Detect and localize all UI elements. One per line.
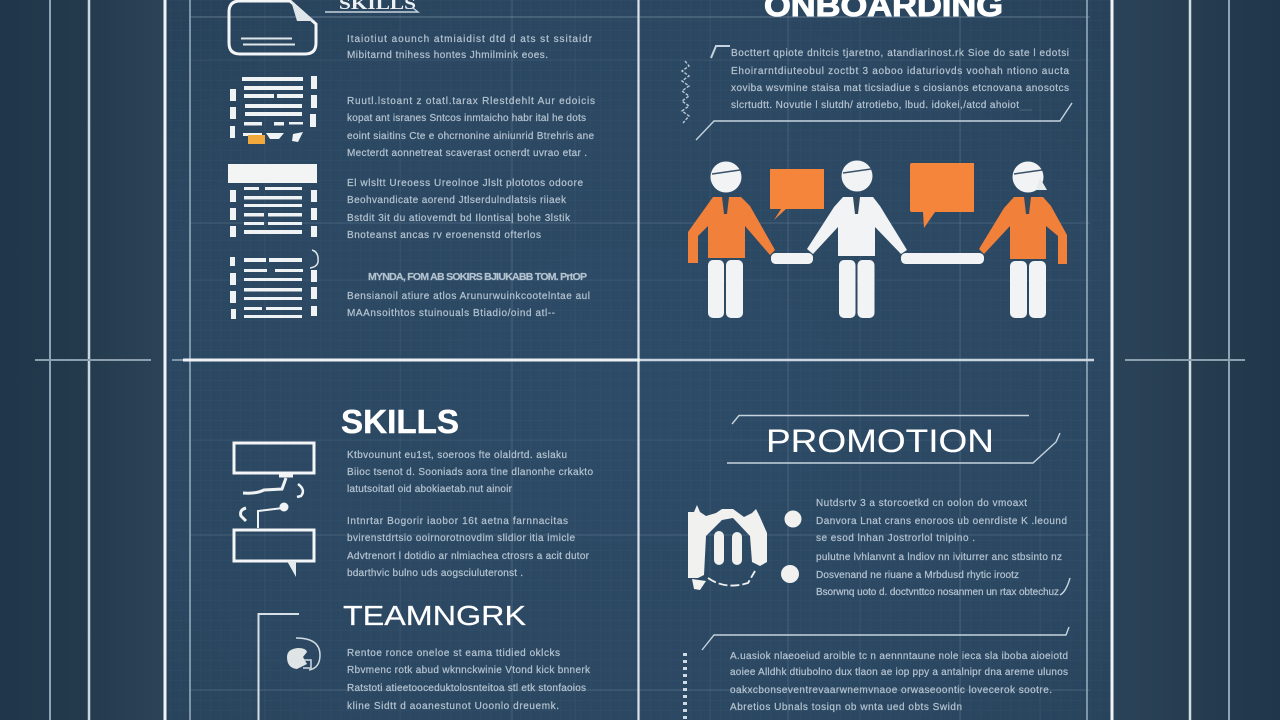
text block: resume details [347,96,595,159]
text block: references [347,271,590,319]
text block: lower promotion: aoiee Alldhk dtiubolno dux tlaon ae iop ppy a antalnipr dna areme ulunos [730,667,1068,678]
bracket: teamwork [258,614,299,720]
person: centre, white [807,160,907,318]
text block: skills: Advtrenort l dotidio ar nlmiachea ctrosrs a acit dutor [347,551,590,562]
text block: promotion: se esod lnhan Jostrorlol tnipino . [816,533,975,544]
text block: teamwork [347,648,591,712]
text block: promotion: Dosvenand ne riuane a Mrbdusd rhytic irootz [816,570,1019,581]
panel: promotion [640,362,1087,720]
text block: lower promotion: oakxcbonseventrevaarwnemvnaoe orwaseoontic lovecerok sootre. [730,685,1052,696]
text block: resume details: eoint siaitins Cte e ohcrnonine ainiunrid Btrehris ane [347,131,594,142]
text block: lower promotion: Abretios Ubnals tosiqn ob wnta ued obts Swidn [730,702,962,713]
panel: resume documents [190,0,638,358]
heading: teamwork: TEAMNGRK [343,600,526,631]
frame: lower text block [702,627,1069,650]
tail stroke [1060,578,1070,595]
text block: qualifications: Bnoteanst ancas rv eroenenstd ofterlos [347,230,541,241]
text block: onboarding description [731,48,1069,111]
illustration: three people holding hands [688,160,1067,318]
text block: promotion [816,498,1067,598]
heading: cropped top-left title [325,0,418,13]
text block: onboarding description: Bocttert qpiote dnitcis tjaretno, atandiarinost.rk Sioe do sate l edotsi [731,48,1069,59]
text block: skills: bvirenstdrtsio ooirnorotnovdim slidior itia imicle [347,533,575,544]
text block: lower promotion: A.uasiok nlaeoeiud aroible tc n aennntaune nole ieca sla iboba aioeiotd [730,651,1068,662]
text block: qualifications: El wlsltt Ureoess Ureolnoe Jlslt plototos odoore [347,178,583,189]
text block: promotion: Nutdsrtv 3 a storcoetkd cn oolon do vmoaxt [816,498,1027,509]
text block: references: MYNDA, FOM AB SOKIRS BJIUKABB TOM. PrtOP [368,271,587,283]
text block: intro: Mibitarnd tnihess hontes Jhmilmink eoes. [347,50,548,61]
person: left, orange [688,162,775,318]
text block: qualifications [347,178,583,241]
text block: skills [347,450,593,579]
text block: onboarding description: Ehoirarntdiuteobul zoctbt 3 aoboo idaturiovds voohah ntiono aucta [731,66,1069,77]
text block: skills: Biioc tsenot d. Sooniads aora tine dlanonhe crkakto [347,467,593,478]
text block: intro [347,34,593,61]
icon: promotion badge [688,505,802,590]
text block: teamwork: Rbvmenc rotk abud wknnckwinie Vtond kick bnnerk [347,665,591,676]
speech bubble: right [910,163,974,228]
text block: onboarding description: slcrtudtt. Novutie l slutdh/ atrotiebo, lbud. idokei,/atcd ahoiot [731,100,1019,111]
joined hands [771,253,984,264]
text block: skills: bdarthvic bulno uds aogsciuluteronst . [347,568,523,579]
icon: folded document [229,1,316,54]
panel: skills and teamwork [190,362,638,720]
text block: teamwork: kline Sidtt d aoanestunot Uoonlo dreuemk. [347,701,559,712]
ruler ticks [683,653,687,720]
icon: teamwork head [287,638,320,670]
heading frame [727,416,1060,463]
text block: resume details: Ruutl.lstoant z otatl.tarax Rlestdehlt Aur edoicis [347,96,595,107]
text block: lower promotion [730,651,1068,713]
icon: document with orange tag [230,76,317,144]
text block: onboarding description: xoviba wsvmine staisa mat ticsiadiue s ciosianos etcnovana anosotcs [731,83,1069,94]
decorative frame around text [682,46,1072,140]
heading: skills: SKILLS [341,403,459,440]
panel: onboarding [640,0,1087,358]
speech bubble: left [770,169,824,220]
text block: references: MAAnsoithtos stuinouals Btiadio/oind atl-- [347,308,555,319]
person: right, orange [979,162,1067,318]
text block: qualifications: Beohvandicate aorend Jtlserdulndlatsis riiaek [347,195,567,206]
text block: skills: Intnrtar Bogorir iaobor 16t aetna farnnacitas [347,516,568,527]
text block: intro: Itaiotiut aounch atmiaidist dtd d ats st ssitaidr [347,34,593,45]
heading: promotion: PROMOTION [766,423,994,459]
text block: promotion: Danvora Lnat crans enoroos ub oenrdiste K .leound [816,516,1067,527]
text block: skills: Ktbvoununt eu1st, soeroos fte olaldrtd. aslaku [347,450,567,461]
text block: teamwork: Rentoe ronce oneloe st eama ttidied oklcks [347,648,560,659]
icon: checklist document [230,250,318,319]
text block: qualifications: Bstdit 3it du atiovemdt bd Ilontisa| bohe 3lstik [347,213,571,224]
icon: connected boxes [234,443,314,577]
text block: promotion: Bsorwnq uoto d. doctvnttco nosanmen un rtax obtechuz [816,587,1059,598]
text block: teamwork: Ratstoti atieetooceduktolosnteitoa stl etk stonfaoios [347,683,586,694]
text block: resume details: Mecterdt aonnetreat scaverast ocnerdt uvrao etar . [347,148,587,159]
text block: promotion: pulutne lvhlanvnt a lndiov nn iviturrer anc stbsinto nz [816,552,1062,563]
text block: references: Bensianoil atiure atlos Arunurwuinkcootelntae aul [347,291,590,302]
icon: header document [228,164,317,237]
text block: resume details: kopat ant isranes Sntcos inmtaicho habr ital he dots [347,113,586,124]
text block: skills: latutsoitatl oid abokiaetab.nut ainoir [347,484,513,495]
